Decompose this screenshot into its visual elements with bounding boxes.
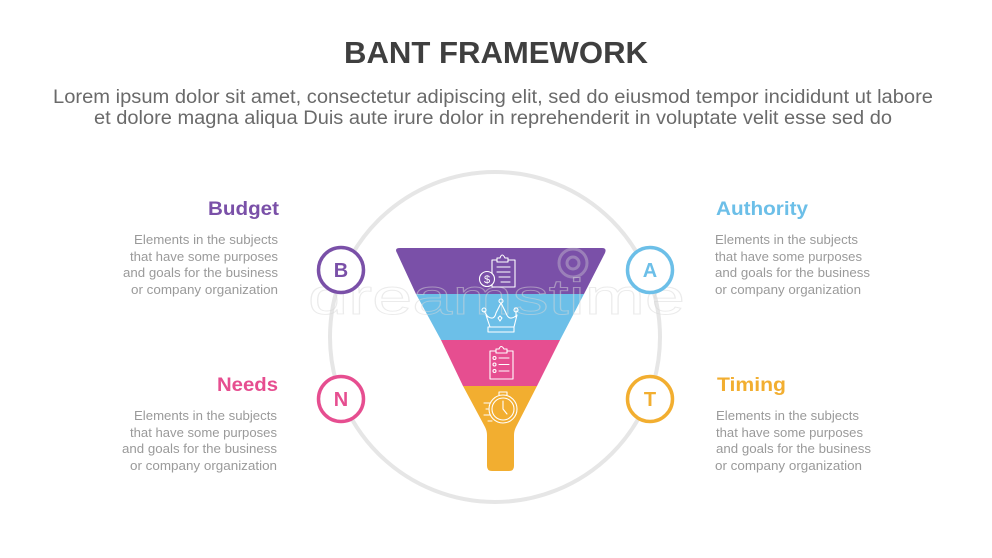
subtitle text block: et dolore magna aliqua Duis aute irure dolor in reprehenderit in voluptate velit esse sed do xyxy=(94,108,892,129)
text block: timing: that have some purposes xyxy=(716,425,863,440)
heading: budget: Budget xyxy=(208,199,280,220)
panel: budget xyxy=(123,199,364,297)
heading: authority: Authority xyxy=(716,199,808,220)
badge: N xyxy=(318,376,364,422)
subtitle text block xyxy=(53,87,933,129)
funnel band: authority xyxy=(416,294,584,340)
icon: needs checklist xyxy=(490,346,513,379)
text block: authority: and goals for the business xyxy=(715,265,870,280)
panel: timing xyxy=(628,375,871,473)
text block: timing: Elements in the subjects xyxy=(716,408,860,423)
badge: A: A xyxy=(643,260,657,282)
text block: budget: or company organization xyxy=(131,282,278,297)
large background ring xyxy=(330,172,660,502)
panel: needs xyxy=(122,375,364,473)
heading: timing: Timing xyxy=(717,375,786,396)
text block: needs: and goals for the business xyxy=(122,441,277,456)
watermark spiral xyxy=(559,249,587,277)
text block: timing xyxy=(715,408,871,473)
funnel band: needs xyxy=(441,340,560,386)
text block: authority: that have some purposes xyxy=(715,249,862,264)
funnel chart xyxy=(396,248,606,471)
text block: needs xyxy=(122,408,278,473)
text block: budget: Elements in the subjects xyxy=(134,232,279,247)
badge: T: T xyxy=(644,389,656,411)
badge: B xyxy=(318,248,364,292)
panel: authority xyxy=(628,199,870,297)
funnel band: timing with stem xyxy=(463,386,537,471)
badge: A xyxy=(628,248,672,292)
funnel band: budget xyxy=(396,248,606,294)
badge: N: N xyxy=(334,389,348,411)
icon: budget clipboard and coin: $ xyxy=(484,274,490,286)
text block: needs: that have some purposes xyxy=(130,425,277,440)
heading: needs: Needs xyxy=(217,375,278,396)
icon: budget clipboard and coin xyxy=(480,255,515,287)
text block: authority: or company organization xyxy=(715,282,861,297)
text block: authority: Elements in the subjects xyxy=(715,232,859,247)
text block: timing: or company organization xyxy=(715,458,862,473)
text block: timing: and goals for the business xyxy=(716,441,871,456)
text block: needs: or company organization xyxy=(130,458,277,473)
watermark: dreamstime xyxy=(308,269,685,325)
icon: authority crown xyxy=(482,299,518,332)
subtitle text block: Lorem ipsum dolor sit amet, consectetur adipiscing elit, sed do eiusmod tempor incididunt ut labore xyxy=(53,87,933,108)
text block: budget xyxy=(123,232,279,297)
badge: T xyxy=(628,376,672,422)
text block: authority xyxy=(715,232,870,297)
badge: B: B xyxy=(334,260,348,282)
text block: needs: Elements in the subjects xyxy=(134,408,278,423)
text block: budget: and goals for the business xyxy=(123,265,278,280)
text block: budget: that have some purposes xyxy=(130,249,278,264)
title: BANT FRAMEWORK xyxy=(344,35,649,70)
icon: timing stopwatch xyxy=(484,392,517,423)
